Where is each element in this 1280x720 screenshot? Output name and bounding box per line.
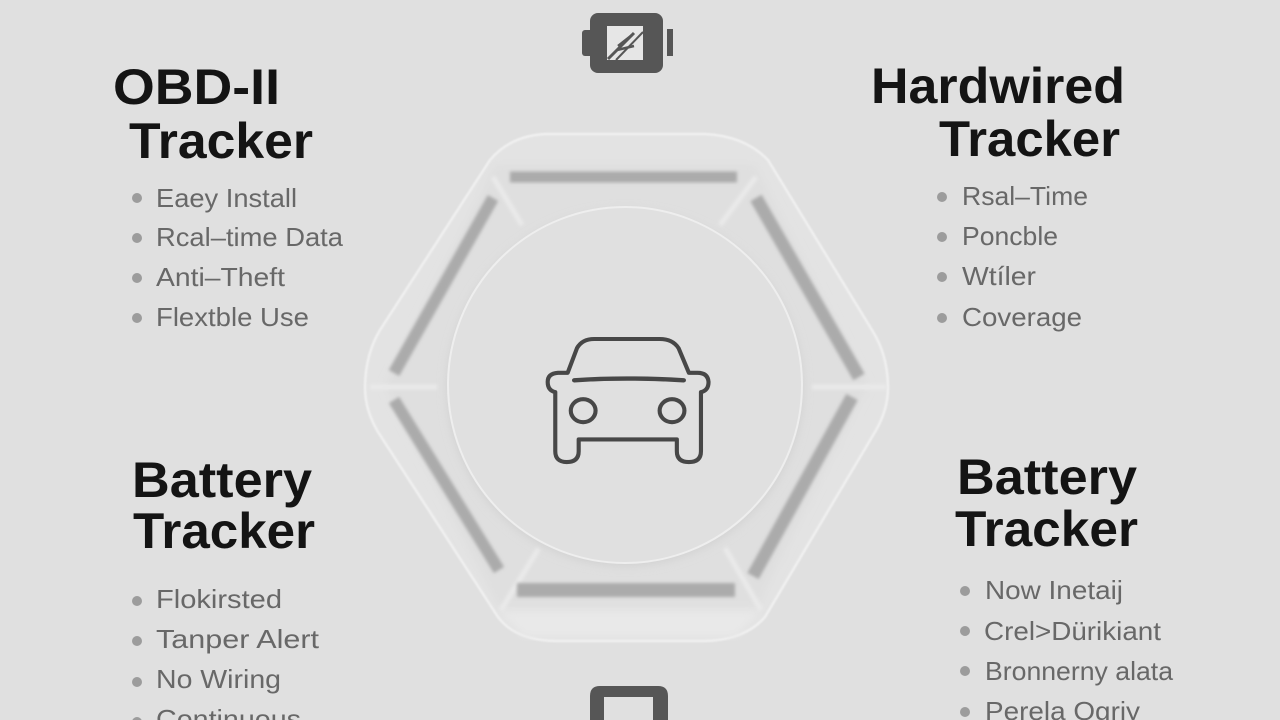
list: battery right features: Bronnerny alata: [985, 656, 1174, 686]
list: hardwired features: Rsal–Time: [962, 181, 1088, 211]
bottom facet: [500, 612, 760, 636]
heading: Hardwired Tracker: Hardwired: [871, 58, 1125, 114]
heading: Battery Tracker right: Tracker: [955, 501, 1138, 557]
central hexagon diagram: [365, 134, 888, 641]
list: OBD-II features: Anti–Theft: [156, 262, 286, 292]
list: OBD-II features: Eaey Install: [156, 183, 297, 213]
heading: OBD-II Tracker: [113, 59, 313, 169]
hexagon body: [365, 134, 888, 641]
heading: Hardwired Tracker: [871, 58, 1125, 167]
list: hardwired features: Coverage: [962, 302, 1082, 332]
icon: car: [548, 339, 709, 462]
circle shadow: [448, 211, 802, 565]
heading: Battery Tracker right: [955, 449, 1138, 557]
heading: Hardwired Tracker: Tracker: [939, 111, 1120, 167]
heading: Battery Tracker left: Battery: [132, 452, 312, 508]
list: battery right features: Crel>Dürikiant: [984, 616, 1162, 646]
list: hardwired features: [937, 181, 1088, 332]
inner tray: [385, 165, 868, 606]
list: battery left features: Flokirsted: [156, 584, 282, 614]
centre circle: [448, 207, 802, 563]
list: OBD-II features: Rcal–time Data: [156, 222, 344, 252]
list: battery right features: Now Inetaij: [985, 575, 1123, 605]
panel: OBD-II tracker: [113, 59, 344, 332]
heading: Battery Tracker right: Battery: [957, 449, 1137, 505]
list: OBD-II features: [132, 183, 344, 332]
spokes: [370, 177, 886, 610]
list: battery left features: [132, 584, 320, 720]
heading: OBD-II Tracker: OBD-II: [113, 59, 280, 115]
heading: Battery Tracker left: Tracker: [133, 503, 315, 559]
heading: Battery Tracker left: [132, 452, 315, 559]
list: OBD-II features: Flextble Use: [156, 302, 309, 332]
heading: OBD-II Tracker: Tracker: [129, 113, 313, 169]
icon: battery top: [582, 13, 673, 73]
list: hardwired features: Poncble: [962, 221, 1058, 251]
icon: device bottom: [590, 686, 668, 720]
list: hardwired features: Wtíler: [962, 261, 1036, 291]
panel: battery tracker left: [132, 452, 320, 720]
recessed bars: [394, 177, 859, 590]
panel: battery tracker right: [955, 449, 1174, 720]
panel: hardwired tracker: [871, 58, 1125, 332]
list: battery left features: No Wiring: [156, 664, 281, 694]
list: battery left features: Tanper Alert: [156, 624, 320, 654]
list: battery right features: [960, 575, 1174, 720]
